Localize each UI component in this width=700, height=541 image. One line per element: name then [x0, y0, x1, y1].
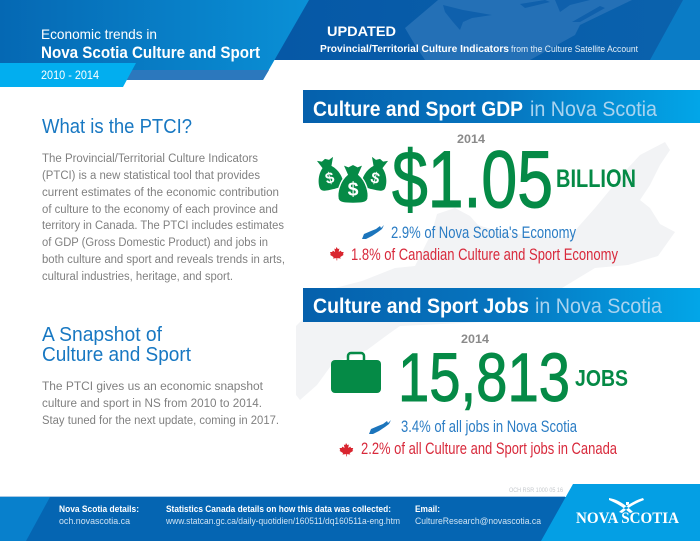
footer: StatCan details: Statistics Canada details on how this data was collected: [166, 504, 391, 515]
header: title panel [0, 0, 309, 87]
stat: share of NS jobs: 3.4% of all jobs in Nova Scotia [401, 417, 577, 436]
icon: money bags [313, 156, 392, 203]
icon: Nova Scotia map [369, 420, 391, 434]
footer: NS details [59, 504, 139, 527]
jobs heading bar: in Nova Scotia [535, 295, 662, 318]
document code: OCH RSR 1000 05 16 [509, 487, 563, 494]
footer: StatCan details [165, 504, 400, 527]
footer [0, 484, 700, 541]
panel: a snapshot: Culture and Sport [42, 344, 191, 366]
panel: what is the PTCI [42, 116, 285, 283]
body text: Stay tuned for the next update, coming in 2017. [42, 415, 279, 427]
panel: a snapshot [42, 324, 279, 427]
stat: share of NS economy: 2.9% of Nova Scotia's Economy [391, 223, 576, 242]
footer: email: Email: [415, 504, 440, 515]
unit: BILLION [556, 165, 636, 193]
header: right banner [270, 0, 700, 60]
body text: current estimates of the economic contribution [42, 187, 279, 199]
background map of Nova Scotia [296, 142, 675, 400]
body text: both culture and sport and reveals trends in arts, [42, 254, 285, 266]
panel: jobs [303, 288, 700, 458]
header map texture [405, 0, 632, 60]
year: 2014 [461, 332, 489, 346]
footer: NS details: och.novascotia.ca [59, 516, 131, 527]
year: 2014 [457, 132, 485, 146]
heading: What is the PTCI? [42, 116, 192, 138]
GDP heading bar: in Nova Scotia [530, 98, 657, 121]
footer: NS details: Nova Scotia details: [59, 504, 139, 515]
GDP heading bar [303, 90, 700, 123]
panel: GDP [303, 90, 700, 264]
body text: territory in Canada. The PTCI includes estimates [42, 220, 284, 232]
icon: money bags: $ [369, 169, 382, 188]
footer: logo panel [541, 484, 700, 541]
updated subtitle: Provincial/Territorial Culture Indicators [320, 43, 509, 55]
icon: Nova Scotia map [362, 225, 384, 239]
footer: email: CultureResearch@novascotia.ca [415, 516, 542, 527]
body text [42, 153, 285, 283]
body text [42, 381, 279, 427]
updated source note: from the Culture Satellite Account [511, 44, 638, 54]
body text: The PTCI gives us an economic snapshot [42, 381, 264, 393]
footer: email [415, 504, 542, 527]
GDP heading bar: Culture and Sport GDP [313, 98, 523, 121]
footer: StatCan details: www.statcan.gc.ca/daily-quotidien/160511/dq160511a-eng.htm [165, 516, 400, 527]
icon: money bags: $ [324, 169, 336, 188]
icon: money bags: $ [348, 178, 359, 200]
heading: A Snapshot of [42, 324, 162, 346]
stat: share of Canadian jobs: 2.2% of all Culture and Sport jobs in Canada [361, 439, 617, 458]
big figure: 15,813 [398, 339, 570, 416]
body text: of GDP (Gross Domestic Product) and jobs in [42, 237, 268, 249]
logo: saltire mark [609, 498, 644, 513]
jobs heading bar [303, 288, 700, 322]
date range: 2010 - 2014 [41, 70, 100, 82]
body text: cultural industries, heritage, and sport. [42, 271, 233, 283]
body text: culture and sport in NS from 2010 to 2014. [42, 398, 262, 410]
icon: briefcase [331, 353, 381, 393]
unit: JOBS [575, 365, 628, 391]
title line 1: Economic trends in [41, 26, 157, 42]
big figure: $1.05 [392, 135, 553, 225]
body text: The Provincial/Territorial Culture Indicators [42, 153, 258, 165]
title line 2: Nova Scotia Culture and Sport [41, 43, 260, 62]
updated heading: UPDATED [327, 23, 396, 39]
icon: maple leaf [340, 443, 353, 456]
icon: maple leaf [330, 247, 344, 260]
body text: of culture to the economy of each province and [42, 204, 278, 216]
jobs heading bar: Culture and Sport Jobs [313, 295, 529, 318]
stat: share of Canadian economy: 1.8% of Canadian Culture and Sport Economy [351, 245, 618, 264]
body text: (PTCI) is a new statistical tool that provides [42, 170, 260, 182]
logo: wordmark: NOVA SCOTIA [576, 510, 679, 527]
